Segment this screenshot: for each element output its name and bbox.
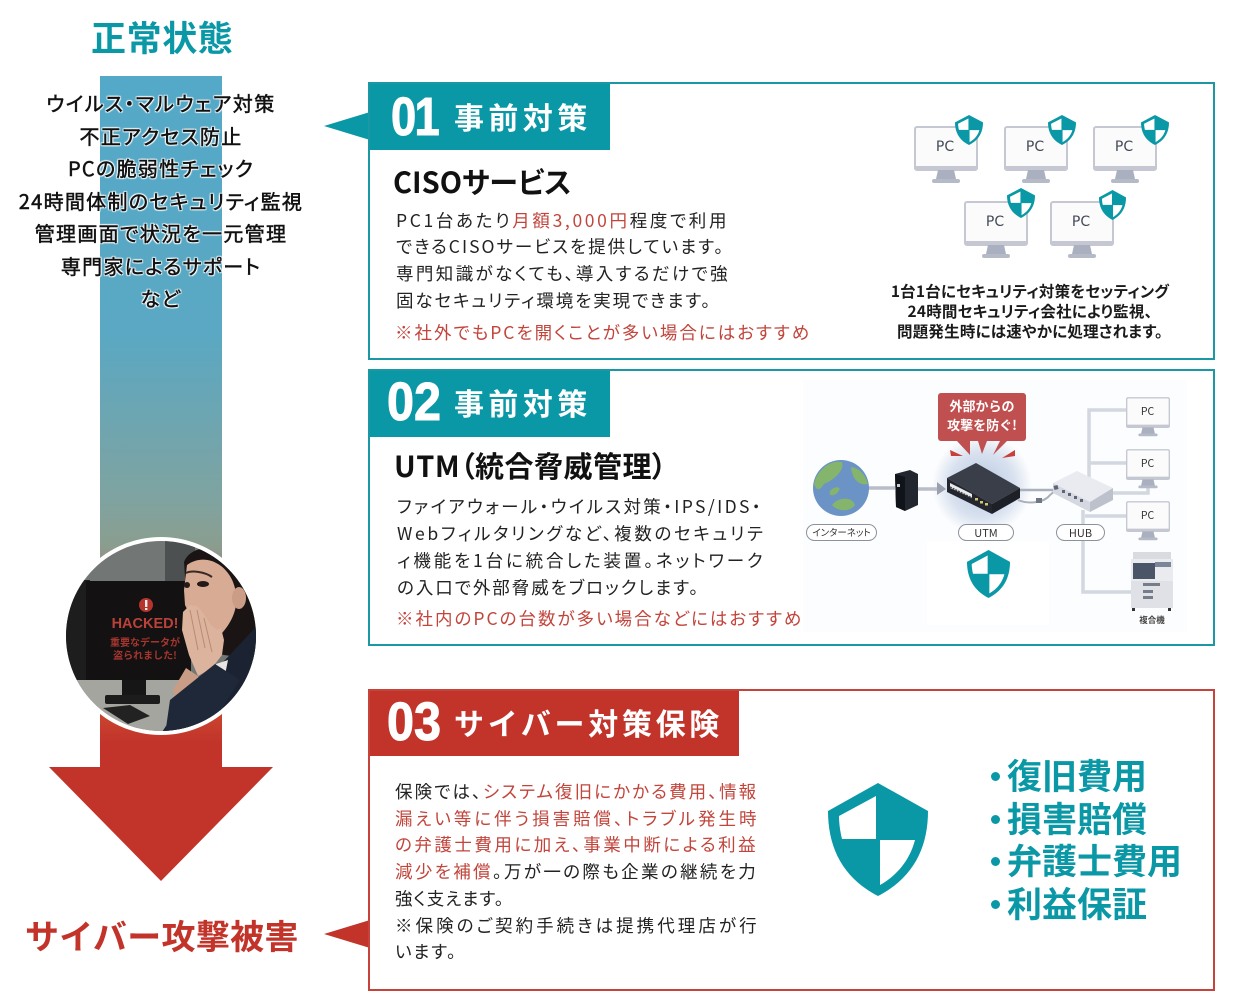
caption: PC security setup: 問題発生時には速やかに処理されます。 — [897, 320, 1163, 342]
modem — [895, 470, 918, 511]
list: normal state measures — [19, 88, 303, 312]
number 01: 01 — [391, 87, 438, 147]
header text 03: サイバー対策保険 — [454, 700, 723, 744]
callout: blocks outside attacks: 攻撃を防ぐ! — [947, 415, 1017, 434]
PC 1: PC — [936, 139, 954, 155]
arrow: normal state to cyber damage — [49, 76, 273, 881]
number 03: 03 — [387, 692, 441, 752]
icon group: PCs with shields — [914, 115, 1169, 258]
text block: insurance description: 漏えい等に伴う損害賠償、トラブル発生時 — [395, 806, 759, 831]
header text 02: 事前対策 — [454, 380, 592, 424]
photo: hacked monitor and worried woman — [66, 537, 256, 735]
PC 2: PC — [1026, 139, 1044, 155]
list: normal state measures: 24時間体制のセキュリティ監視 — [19, 186, 303, 215]
list: normal state measures: など — [141, 283, 181, 312]
list: normal state measures: 不正アクセス防止 — [80, 121, 242, 150]
photo: hacked monitor and worried woman: HACKED! — [112, 616, 178, 632]
shield 3 — [1141, 115, 1169, 145]
PC 2 — [1004, 126, 1068, 183]
printer — [1131, 552, 1173, 611]
text block: CISO description: できるCISOサービスを提供しています。 — [396, 234, 725, 259]
list: insurance coverage: 損害賠償 — [1007, 792, 1147, 843]
text block: insurance description: 強く支えます。 — [395, 886, 505, 911]
text block: insurance description: ※保険のご契約手続きは提携代理店が行 — [395, 913, 760, 938]
label: internet: インターネット — [812, 525, 871, 539]
text block: CISO description: PC1台あたり月額3,000円程度で利用 — [396, 208, 729, 233]
PC 3 — [1093, 126, 1157, 183]
list: normal state measures: 専門家によるサポート — [61, 251, 261, 280]
text block: CISO description: 専門知識がなくても、導入するだけで強 — [396, 261, 730, 286]
HUB device — [1053, 471, 1113, 512]
diagram: UTM network — [806, 393, 1173, 626]
callout: blocks outside attacks: 外部からの — [949, 396, 1015, 415]
heading: CISO service: CISOサービス — [393, 160, 572, 202]
header text 01: 事前対策 — [454, 94, 592, 138]
pointer: teal triangle — [324, 112, 368, 140]
text block: insurance description: の弁護士費用に加え、事業中断による利益 — [395, 832, 758, 857]
list: normal state measures: 管理画面で状況を一元管理 — [35, 218, 287, 247]
panel: 01 CISO service — [368, 82, 1215, 360]
header band 02 — [370, 371, 610, 437]
PC middle: PC — [1141, 456, 1154, 471]
photo: hacked monitor and worried woman: 重要なデータが — [110, 634, 180, 649]
pointer: red triangle — [324, 920, 368, 948]
header band 03 — [370, 691, 739, 756]
text block: UTM description — [396, 494, 803, 631]
text block: CISO description — [395, 208, 811, 345]
list: insurance coverage: 復旧費用 — [1007, 749, 1147, 800]
globe — [813, 460, 869, 516]
PC 1 — [914, 126, 978, 183]
text block: insurance description: 保険では、システム復旧にかかる費用、情報 — [395, 779, 758, 804]
list: normal state measures: PCの脆弱性チェック — [68, 153, 254, 182]
heading: UTM: UTM（統合脅威管理） — [394, 444, 667, 486]
list: insurance coverage — [991, 749, 1182, 928]
caption: PC security setup: 24時間セキュリティ会社により監視、 — [908, 300, 1152, 322]
PC top: PC — [1141, 404, 1154, 419]
icon: large shield — [828, 783, 928, 896]
shield 4 — [1007, 188, 1035, 218]
text block: insurance description: 減少を補償。万が一の際も企業の継続を力 — [395, 859, 758, 884]
header band 01 — [370, 84, 610, 150]
shield 2 — [1048, 115, 1076, 145]
list: insurance coverage: 利益保証 — [1007, 877, 1147, 928]
title: normal state: 正常状態 — [91, 11, 233, 62]
panel: 02 UTM — [368, 369, 1215, 646]
PC 5 — [1050, 201, 1114, 258]
caption: PC security setup — [891, 280, 1170, 342]
PC 4 — [964, 201, 1028, 258]
text block: UTM description: ※社内のPCの台数が多い場合などにはおすすめ — [396, 606, 803, 631]
text block: insurance description: います。 — [395, 939, 458, 964]
panel: 03 cyber insurance — [368, 689, 1215, 991]
UTM device — [947, 463, 1020, 514]
PC 4: PC — [986, 214, 1004, 230]
PC bottom: PC — [1141, 508, 1154, 523]
label: multifunction printer: 複合機 — [1139, 614, 1165, 626]
label: UTM: UTM — [974, 525, 998, 541]
heading: cyber attack damage: サイバー攻撃被害 — [25, 910, 299, 959]
PC top — [1126, 398, 1170, 436]
text block: UTM description: Webフィルタリングなど、複数のセキュリテ — [397, 521, 766, 546]
photo: hacked monitor and worried woman: 盗られました! — [113, 647, 177, 662]
list: insurance coverage: 弁護士費用 — [1007, 834, 1182, 885]
list: normal state measures: ウイルス・マルウェア対策 — [46, 88, 276, 117]
PC bottom — [1126, 502, 1170, 540]
text block: UTM description: の入口で外部脅威をブロックします。 — [397, 575, 700, 600]
shield 1 — [955, 115, 983, 145]
text block: CISO description: ※社外でもPCを開くことが多い場合にはおすすめ — [395, 320, 811, 345]
callout: blocks outside attacks — [938, 393, 1026, 458]
PC middle — [1126, 450, 1170, 488]
PC 3: PC — [1115, 139, 1133, 155]
text block: UTM description: ファイアウォール・ウイルス対策・IPS/IDS・ — [397, 494, 763, 519]
label: HUB: HUB — [1069, 525, 1092, 541]
text block: CISO description: 固なセキュリティ環境を実現できます。 — [396, 288, 712, 313]
label: HUB — [1056, 524, 1104, 541]
text block: insurance description — [395, 779, 760, 964]
PC 5: PC — [1072, 214, 1090, 230]
shield icon UTM — [967, 550, 1010, 598]
shield 5 — [1099, 190, 1126, 220]
number 02: 02 — [387, 372, 441, 432]
caption: PC security setup: 1台1台にセキュリティ対策をセッティング — [891, 280, 1169, 302]
label: UTM — [958, 524, 1014, 541]
text block: UTM description: ィ機能を1台に統合した装置。ネットワーク — [397, 548, 766, 573]
